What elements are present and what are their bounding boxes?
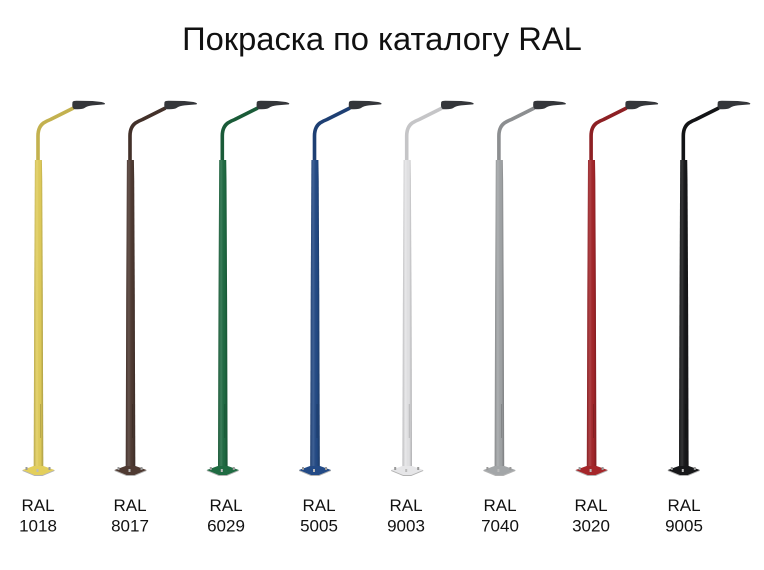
label: RAL 7040: RAL — [483, 496, 517, 515]
label: RAL 3020: 3020 — [572, 516, 610, 536]
title: Покраска по каталогу RAL — [182, 20, 582, 57]
lamp post: RAL 8017 brown — [114, 101, 197, 476]
label: RAL 6029: RAL — [209, 496, 243, 515]
label: RAL 7040: 7040 — [481, 516, 519, 536]
lamp post: RAL 3020 red — [576, 101, 658, 476]
label: RAL 9003: RAL — [389, 496, 423, 515]
label: RAL 5005: RAL — [302, 496, 336, 515]
label: RAL 9005: RAL — [667, 496, 701, 515]
lamp post: RAL 5005 blue — [299, 101, 382, 476]
lamp post: RAL 9003 white — [391, 101, 474, 476]
label: RAL 6029: 6029 — [207, 516, 245, 536]
lamp post: RAL 7040 grey — [483, 101, 566, 476]
label: RAL 9005: 9005 — [665, 516, 703, 536]
label: RAL 9003: 9003 — [387, 516, 425, 536]
label: RAL 1018: RAL — [21, 496, 55, 515]
lamp post: RAL 6029 green — [207, 101, 289, 476]
label: RAL 8017: RAL — [113, 496, 147, 515]
label: RAL 1018: 1018 — [19, 516, 57, 536]
label: RAL 3020: RAL — [574, 496, 608, 515]
label: RAL 5005: 5005 — [300, 516, 338, 536]
lamp post: RAL 9005 black — [668, 101, 750, 476]
lamp post: RAL 1018 yellow — [22, 101, 105, 476]
label: RAL 8017: 8017 — [111, 516, 149, 536]
